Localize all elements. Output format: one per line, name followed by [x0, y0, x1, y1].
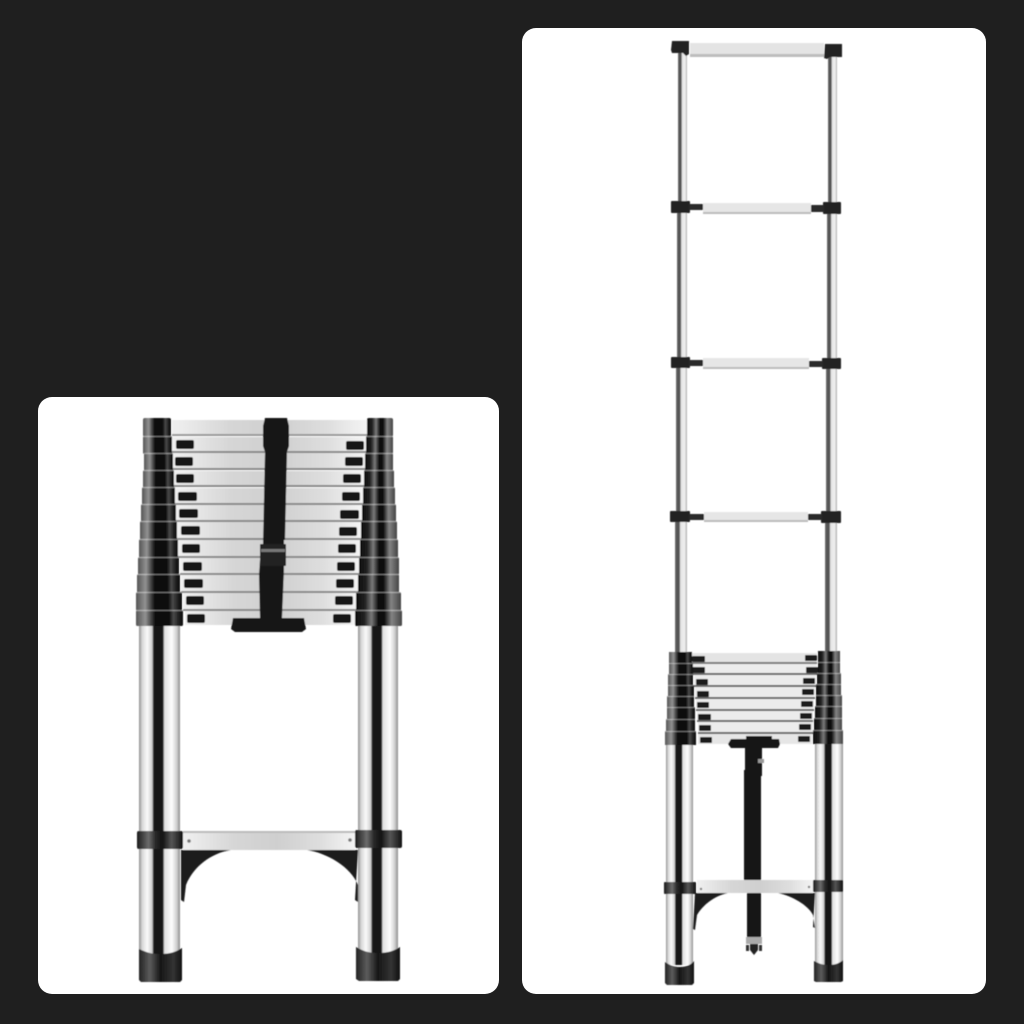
- step support brackets: [181, 850, 358, 902]
- bottom step: [697, 880, 813, 893]
- stacked rungs: [172, 420, 367, 625]
- telescoping poles: [675, 45, 837, 653]
- left rung buttons: [175, 440, 205, 623]
- collapsed ladder illustration: [136, 418, 402, 982]
- rubber feet: [665, 960, 843, 985]
- extended ladder illustration: [664, 41, 843, 985]
- right rung buttons: [333, 441, 364, 623]
- right collapsed column: [355, 418, 402, 626]
- left collapsed column: [665, 652, 696, 745]
- left and right lower tubes: [139, 620, 398, 955]
- left collapsed column: [136, 418, 183, 626]
- rung buttons: [692, 655, 818, 743]
- hanging strap with handle and buckle: [728, 736, 780, 955]
- bottom step: [183, 831, 355, 850]
- top rung: [671, 41, 842, 59]
- step clamps: [664, 880, 843, 894]
- step clamps: [137, 830, 402, 849]
- lower tubes: [666, 740, 843, 965]
- stacked rungs: [692, 653, 817, 744]
- panel: extended ladder: [522, 28, 986, 994]
- upper rung: [671, 201, 841, 214]
- rubber feet: [139, 947, 400, 982]
- panel: collapsed ladder: [38, 397, 499, 994]
- right collapsed column: [813, 651, 843, 744]
- middle rung: [671, 357, 841, 369]
- step support brackets: [693, 893, 815, 930]
- lower rung: [670, 511, 841, 523]
- carry strap with buckle and handle: [231, 418, 306, 632]
